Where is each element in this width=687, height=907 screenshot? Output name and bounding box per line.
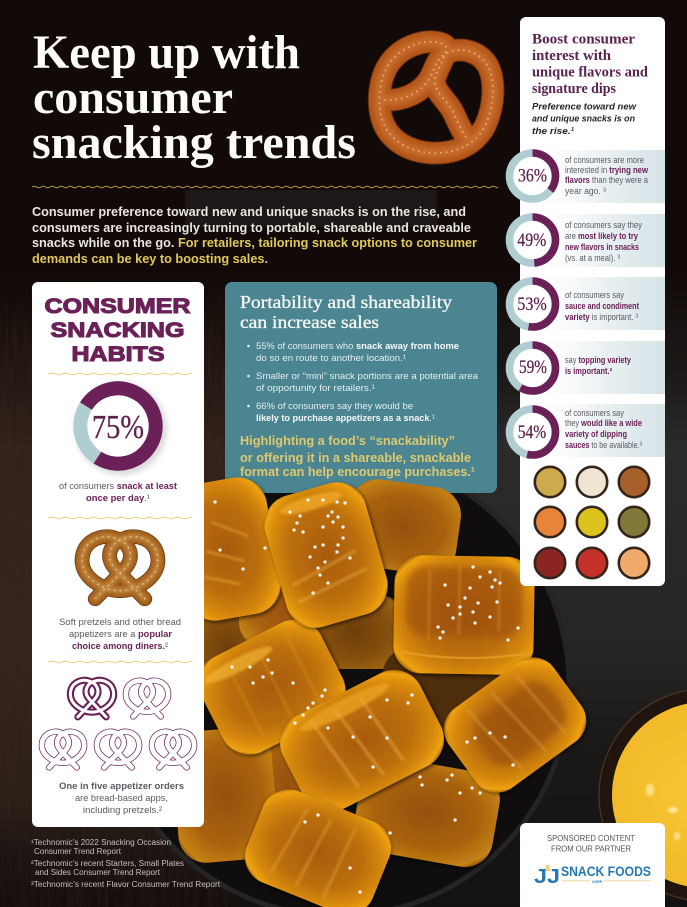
bullet list: 55% of consumers who snack away from home <box>256 341 459 352</box>
stat row: 59% <box>510 341 665 394</box>
pretzel bite: left top <box>167 473 285 625</box>
panel: boost consumer interest <box>510 17 665 586</box>
sponsor text: FROM OUR PARTNER <box>551 844 631 854</box>
sponsor text: SPONSORED CONTENT <box>547 834 635 843</box>
callout: snackability: Highlighting a food’s “snackability” <box>240 433 455 448</box>
title: consumer <box>33 71 233 124</box>
stat row: 36% <box>510 150 665 203</box>
icon: outline pretzel <box>42 732 84 767</box>
panel: portability and shareability <box>225 282 497 493</box>
text: snack once per day: once per day.¹ <box>86 493 150 504</box>
heading: consumer snacking habits: SNACKING <box>50 318 184 342</box>
bullet list: do so en route to another location.¹ <box>256 353 406 364</box>
text: popular choice: Soft pretzels and other bread <box>59 617 181 628</box>
intro paragraph: snacks while on the go. For retailers, tailoring snack options to consumer <box>32 236 477 250</box>
stat row: 36%: of consumers are more <box>565 155 644 165</box>
stat row: 59%: say topping variety <box>565 355 631 365</box>
stat row: 54% <box>510 404 665 457</box>
stat row: 36%: interested in trying new <box>565 165 648 175</box>
stat row: 54%: variety of dipping <box>565 429 627 439</box>
serving bowl <box>107 454 569 907</box>
heading: boost consumer interest: Boost consumer <box>532 32 635 48</box>
panel: consumer snacking habits <box>32 282 204 827</box>
stat row: 49%: new flavors in snacks <box>565 242 639 252</box>
stat row: 36%: 36% <box>518 166 547 187</box>
pretzel bite: center front <box>270 660 454 822</box>
heading: portability: can increase sales <box>240 312 379 332</box>
heading: boost consumer interest: interest with <box>532 48 612 64</box>
stat row: 49%: of consumers say they <box>565 220 643 230</box>
pretzel bite: bottom front <box>237 781 399 907</box>
heading: consumer snacking habits: CONSUMER <box>44 294 191 318</box>
callout: snackability: or offering it in a shareable, snackable <box>240 450 471 465</box>
intro paragraph: consumers are increasingly turning to portable, shareable and craveable <box>32 221 471 235</box>
footnotes: Consumer Trend Report <box>34 847 122 856</box>
stat row: 59%: is important.³ <box>565 366 612 376</box>
icon: soft pretzel photo <box>82 537 158 599</box>
stat row: 49%: (vs. at a meal). ³ <box>565 253 620 263</box>
footnotes: and Sides Consumer Trend Report <box>35 868 161 877</box>
pretzel bite: right lower <box>434 647 596 803</box>
subheading <box>532 102 637 137</box>
heading: consumer snacking habits <box>44 294 191 366</box>
pretzel bites, back layer <box>169 476 507 871</box>
sponsor text <box>547 834 635 854</box>
footnotes: ¹Technomic’s 2022 Snacking Occasion <box>31 838 171 847</box>
wavy divider <box>32 185 498 189</box>
title: snacking trends <box>32 116 356 169</box>
stat row: 36%: flavors than they were a <box>565 175 648 185</box>
logo: J&J Snack Foods: SNACK FOODS <box>561 864 651 879</box>
text: popular choice: choice among diners.² <box>72 641 168 652</box>
logo: J&J Snack Foods <box>534 864 651 888</box>
text: popular choice: appetizers are a popular <box>69 629 172 640</box>
footnotes: ³Technomic’s recent Flavor Consumer Trend Report <box>31 880 221 889</box>
intro paragraph: demands can be key to boosting sales. <box>32 252 268 266</box>
bullet list: Smaller or “mini” snack portions are a potential area <box>256 371 479 382</box>
dipping sauce bowls <box>535 467 649 578</box>
stat row: 49% <box>510 214 665 267</box>
stat row: 53%: 53% <box>517 294 547 315</box>
pretzel bite: right large <box>393 555 535 675</box>
text: one in five: One in five appetizer orders <box>59 781 184 792</box>
logo: J&J Snack Foods: CORP. <box>592 880 603 884</box>
heading: portability <box>240 292 452 332</box>
text: one in five <box>59 781 184 816</box>
logo: J&J Snack Foods: JJ <box>534 866 560 888</box>
salt on bites <box>215 500 518 892</box>
title: Keep up with <box>33 26 300 79</box>
intro paragraph <box>32 205 477 266</box>
stat row: 54%: they would like a wide <box>565 418 642 428</box>
intro paragraph: Consumer preference toward new and unique snacks is on the rise, and <box>32 205 466 219</box>
stat row: 49%: are most likely to try <box>565 231 638 241</box>
bullet list: 66% of consumers say they would be <box>256 401 413 412</box>
stat row: 54%: 54% <box>518 422 546 443</box>
text: popular choice <box>59 617 181 652</box>
stat row: 54%: sauces to be available.³ <box>565 440 642 450</box>
text: one in five: including pretzels.² <box>83 805 162 816</box>
footnotes: ²Technomic’s recent Starters, Small Plates <box>31 859 184 868</box>
stat row: 53%: variety is important. ³ <box>565 312 638 322</box>
heading: boost consumer interest: unique flavors and <box>532 64 649 80</box>
bullet list: of opportunity for retailers.¹ <box>256 383 375 394</box>
bowl of cheese dip <box>599 689 687 901</box>
icon: outline pretzel <box>97 732 139 767</box>
icon: outline pretzel <box>126 681 168 716</box>
pretzel bite: left middle <box>188 609 356 765</box>
text: snack once per day: of consumers snack at least <box>59 481 178 492</box>
icon: filled pretzel <box>70 680 114 717</box>
stat row: 54%: of consumers say <box>565 408 625 418</box>
donut chart: 75% <box>66 374 170 478</box>
text: snack once per day <box>59 481 178 504</box>
panel: sponsor <box>520 823 665 907</box>
stat row: 53% <box>510 277 665 330</box>
icon: outline pretzel <box>152 732 194 767</box>
subheading: and unique snacks is on <box>532 114 635 125</box>
logo: J&J Snack Foods: & <box>545 864 551 873</box>
donut chart: 75%: 75% <box>92 409 144 446</box>
subheading: Preference toward new <box>532 102 637 112</box>
heading: consumer snacking habits: HABITS <box>72 342 164 366</box>
bullet list <box>247 341 479 424</box>
pretzel bite: top center <box>257 475 395 635</box>
callout: snackability <box>240 433 475 479</box>
stat row: 53%: sauce and condiment <box>565 301 639 311</box>
heading: portability: Portability and shareability <box>240 292 452 312</box>
text: one in five: are bread-based apps, <box>75 793 168 804</box>
callout: snackability: format can help encourage purchases.¹ <box>240 464 475 479</box>
photo: pretzel bites <box>167 473 596 907</box>
subheading: the rise.¹ <box>532 126 575 137</box>
icon group: one in five pretzels <box>42 680 194 767</box>
heading: boost consumer interest <box>532 32 649 97</box>
bullet list: likely to purchase appetizers as a snack.¹ <box>256 413 435 424</box>
footnotes <box>31 838 221 889</box>
stat row: 49%: 49% <box>517 230 546 251</box>
stat row: 53%: of consumers say <box>565 290 625 300</box>
title <box>32 26 356 169</box>
stat row: 36%: year ago. ³ <box>565 186 606 196</box>
heading: boost consumer interest: signature dips <box>532 81 616 97</box>
icon: large salted pretzel photo <box>379 42 493 153</box>
stat row: 59%: 59% <box>519 357 547 378</box>
